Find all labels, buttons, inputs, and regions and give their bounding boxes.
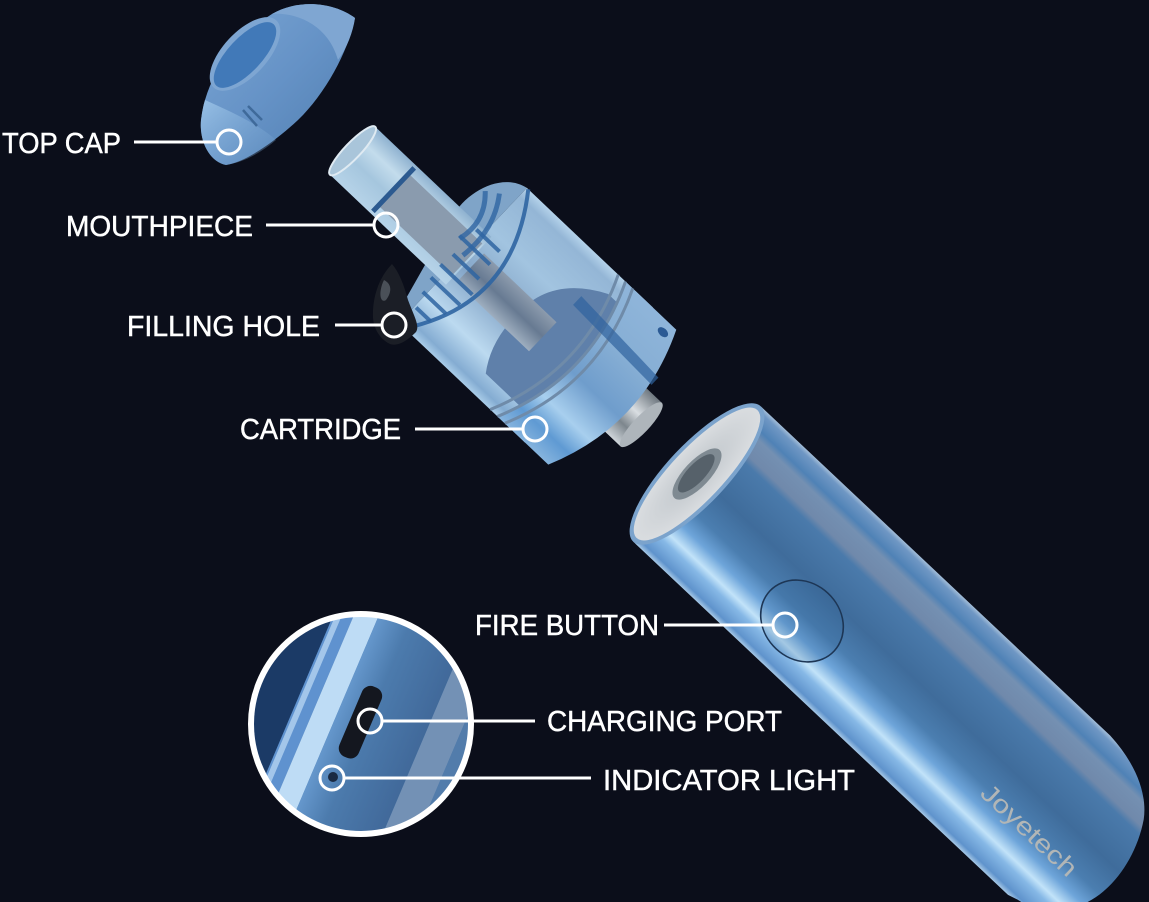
mouthpiece tube	[324, 121, 491, 285]
label: mouthpiece	[66, 211, 398, 243]
label: top cap: TOP CAP	[2, 128, 121, 160]
inner blue mechanics	[403, 224, 507, 330]
central tube	[456, 253, 557, 351]
air hole	[656, 325, 670, 339]
label: cartridge: CARTRIDGE	[240, 414, 401, 446]
label: mouthpiece: MOUTHPIECE	[66, 211, 253, 243]
indicator light hole	[328, 772, 338, 782]
label: fire button: FIRE BUTTON	[475, 610, 659, 642]
label: filling hole	[127, 311, 406, 343]
base	[497, 282, 692, 479]
battery	[611, 386, 1149, 902]
battery body	[633, 406, 1149, 902]
fire button	[744, 563, 860, 679]
connector post	[590, 374, 668, 452]
base dark stripe	[570, 296, 663, 385]
charging port slot	[336, 683, 385, 761]
battery top face	[611, 386, 783, 562]
cartridge	[283, 78, 711, 498]
tank dome	[373, 163, 527, 323]
filling hole seal	[373, 264, 417, 345]
inner chamber	[472, 258, 631, 419]
label: filling hole: FILLING HOLE	[127, 311, 320, 343]
label: charging port	[358, 706, 782, 738]
tank	[399, 188, 653, 443]
label: top cap	[2, 128, 241, 160]
label: fire button	[475, 610, 797, 642]
inset: charging port close-up	[248, 611, 474, 837]
label: cartridge	[240, 414, 547, 446]
label: indicator light: INDICATOR LIGHT	[603, 765, 855, 797]
seal ring	[400, 189, 555, 349]
label: charging port: CHARGING PORT	[547, 706, 782, 738]
top cap	[198, 4, 355, 165]
base rings	[490, 275, 648, 438]
brand logo: Joyetech	[975, 779, 1083, 883]
label: indicator light	[320, 765, 855, 797]
